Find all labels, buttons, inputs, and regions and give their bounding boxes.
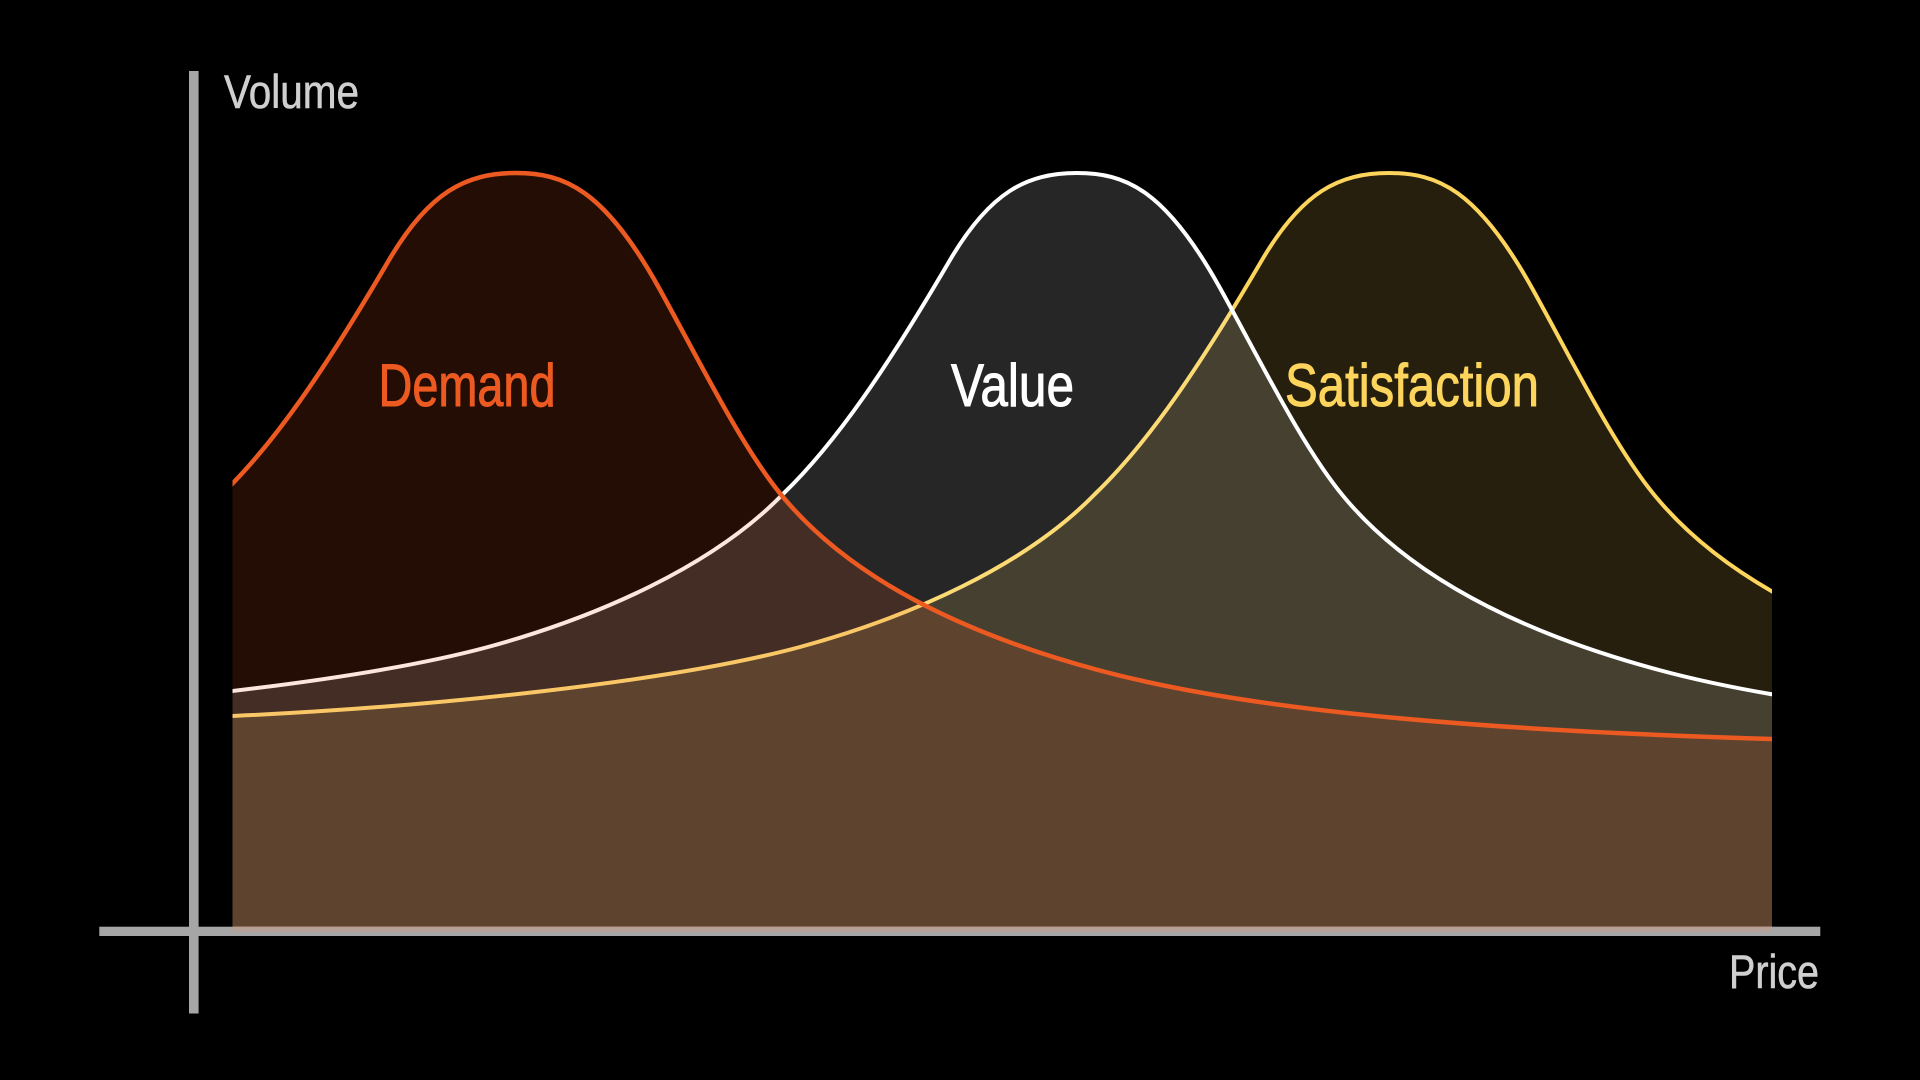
curve: demand — [222, 173, 1772, 940]
curve: value — [232, 171, 1772, 927]
curve: satisfaction — [232, 171, 1772, 927]
axis label: Volume: Volume — [224, 65, 359, 118]
label: Satisfaction: Satisfaction — [1285, 352, 1539, 419]
x axis — [99, 927, 1820, 936]
x axis tint under the filled area — [232, 927, 1772, 932]
y axis — [189, 71, 199, 1014]
chart: demand, value and satisfaction curves — [99, 71, 1820, 1014]
axis label: Price: Price — [1729, 945, 1819, 998]
label: Demand: Demand — [378, 352, 556, 419]
label: Value: Value — [951, 352, 1074, 419]
